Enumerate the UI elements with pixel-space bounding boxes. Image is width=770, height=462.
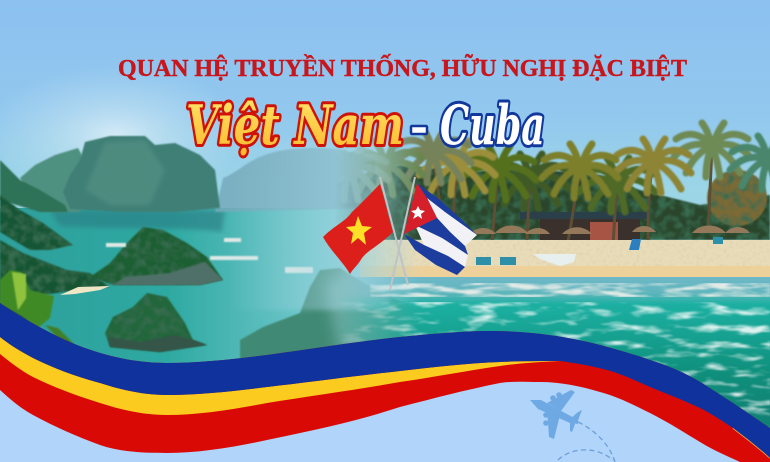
heading: Việt Nam: Việt Nam xyxy=(186,93,404,157)
panel: Ha Long Bay scene xyxy=(0,136,420,378)
small island rock base xyxy=(108,335,207,352)
boats xyxy=(106,238,313,273)
beach sand xyxy=(360,240,770,266)
flag star xyxy=(411,206,425,219)
red band xyxy=(0,303,770,462)
left lower slope xyxy=(0,240,110,320)
palm crowns xyxy=(312,123,770,212)
mountain shading xyxy=(85,140,165,205)
main limestone mountain xyxy=(63,136,220,212)
sand texture xyxy=(475,240,759,266)
white lounger xyxy=(533,254,576,266)
heading: Cuba: Cuba xyxy=(440,93,545,157)
thin gold edge xyxy=(733,428,770,458)
left-to-right haze blend xyxy=(230,140,390,310)
thatched beach huts xyxy=(470,226,750,234)
central island rock base xyxy=(113,262,223,285)
heading: dash xyxy=(411,126,427,134)
sea foam xyxy=(330,302,770,436)
right hazy island xyxy=(240,268,420,375)
palm trunks xyxy=(434,156,713,240)
water reflections xyxy=(50,210,225,232)
bay water xyxy=(0,208,420,378)
sun glow xyxy=(0,65,245,205)
left ridge xyxy=(0,160,68,212)
foreground leaves xyxy=(0,270,75,345)
sea xyxy=(330,277,770,437)
blue band xyxy=(0,303,770,458)
small beach xyxy=(60,286,110,295)
area below the ribbon xyxy=(0,340,770,462)
resort building xyxy=(520,212,650,240)
shore surf xyxy=(370,283,770,297)
yellow band xyxy=(0,337,560,415)
wet sand xyxy=(360,266,770,278)
icon: Cuba flag xyxy=(404,183,477,275)
panel: Cuba beach scene xyxy=(312,123,770,437)
icon: Vietnam flag xyxy=(323,184,393,274)
flag star xyxy=(346,216,372,245)
red triangle xyxy=(404,183,437,234)
dashed flight path xyxy=(558,422,615,462)
small island xyxy=(105,293,207,352)
central island xyxy=(90,227,223,285)
sun loungers xyxy=(476,237,723,265)
left upper hill xyxy=(0,195,73,250)
distant hazy mountains xyxy=(215,148,375,212)
title: QUAN HỆ TRUYỀN THỐNG, HỮU NGHỊ ĐẶC BIỆT xyxy=(118,55,687,82)
right island haze xyxy=(325,268,420,375)
flag poles xyxy=(380,177,415,290)
bushy tree xyxy=(707,170,767,226)
back left mountain xyxy=(20,148,90,212)
icon: airplane xyxy=(530,390,582,439)
tree mass xyxy=(330,165,770,240)
decorative ribbon in flag colours xyxy=(0,303,770,462)
